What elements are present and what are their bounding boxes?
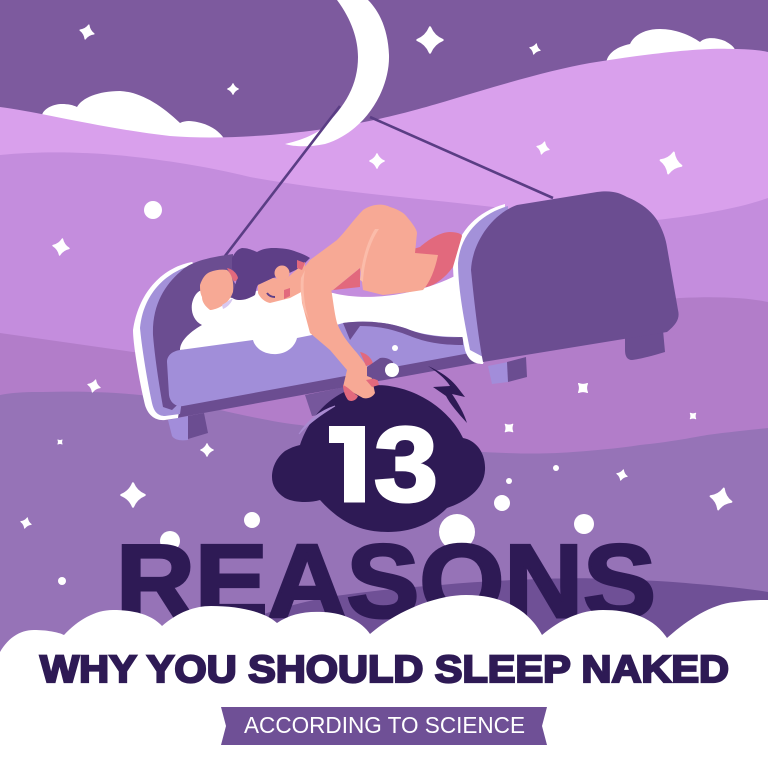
number 13: 3: [374, 406, 438, 524]
number 13: [329, 425, 436, 504]
bed: [133, 191, 679, 440]
title: reasons: REASONS: [116, 524, 656, 640]
ribbon: according to science: ACCORDING TO SCIENCE: [244, 712, 525, 738]
white cloud footer: [0, 595, 768, 768]
sheet shadow: [343, 322, 463, 345]
mattress: [167, 300, 470, 406]
hair: [232, 248, 310, 300]
snore zigzag: [428, 366, 467, 423]
bed legs: [168, 330, 665, 440]
stars: [19, 23, 734, 585]
ribbon: according to science: [221, 707, 547, 745]
sheet: [305, 272, 463, 337]
alarm cloud badge: [272, 385, 485, 532]
moon: [285, 0, 389, 146]
top right cloud: [606, 29, 736, 65]
left headboard: [133, 254, 245, 420]
ropes: [225, 106, 553, 256]
subtitle: WHY YOU SHOULD SLEEP NAKED: [40, 649, 729, 691]
top left cloud: [42, 91, 225, 140]
badge highlight: [299, 406, 335, 434]
person: [200, 205, 462, 310]
thigh highlight: [360, 229, 379, 282]
right headboard: [453, 191, 679, 364]
pink shorts: [333, 232, 462, 290]
pillow: [180, 285, 312, 354]
number 13: 1: [326, 406, 385, 524]
phone in hand: [367, 358, 393, 380]
sleeping hand by face: [200, 268, 238, 310]
bed sparkles: [385, 345, 399, 377]
bed frame: [163, 350, 483, 420]
torso and legs: [300, 205, 438, 300]
arm highlight: [301, 270, 309, 320]
face: [258, 260, 305, 303]
hanging arm and hand: [300, 267, 393, 401]
